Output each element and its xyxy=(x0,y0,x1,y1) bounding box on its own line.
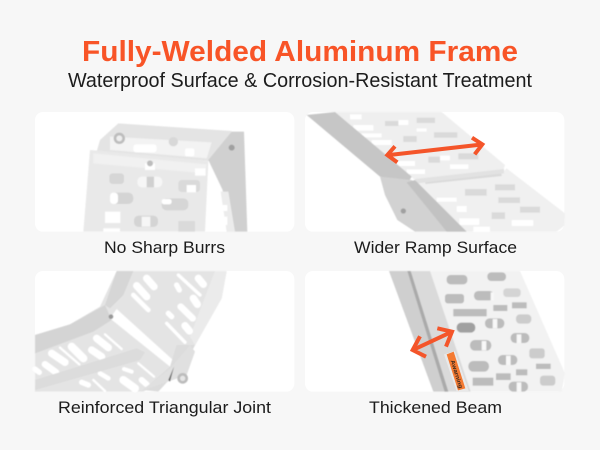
photo: side beam with perforated deck xyxy=(305,271,565,392)
label: reinforced triangular joint: Reinforced Triangular Joint xyxy=(58,398,271,417)
photo: joint seen from below xyxy=(35,271,294,392)
photo: folded ramp hinge top xyxy=(35,112,294,232)
warning sticker xyxy=(444,351,469,392)
panel: wider ramp surface xyxy=(305,112,565,232)
photo: ramp surface with rail xyxy=(305,112,565,232)
title: Fully-Welded Aluminum Frame xyxy=(82,36,518,68)
arrow: width xyxy=(387,138,482,162)
panel: reinforced triangular joint xyxy=(35,271,294,392)
label: wider ramp surface: Wider Ramp Surface xyxy=(354,238,517,257)
subtitle: Waterproof Surface & Corrosion-Resistant Treatment xyxy=(68,70,532,92)
arrow: beam thickness xyxy=(413,328,452,357)
label: thickened beam: Thickened Beam xyxy=(369,398,502,417)
warning sticker: Awarning xyxy=(449,359,463,390)
label: no sharp burrs: No Sharp Burrs xyxy=(104,238,225,257)
panel: thickened beam xyxy=(305,271,565,392)
panel: no sharp burrs xyxy=(35,112,294,232)
